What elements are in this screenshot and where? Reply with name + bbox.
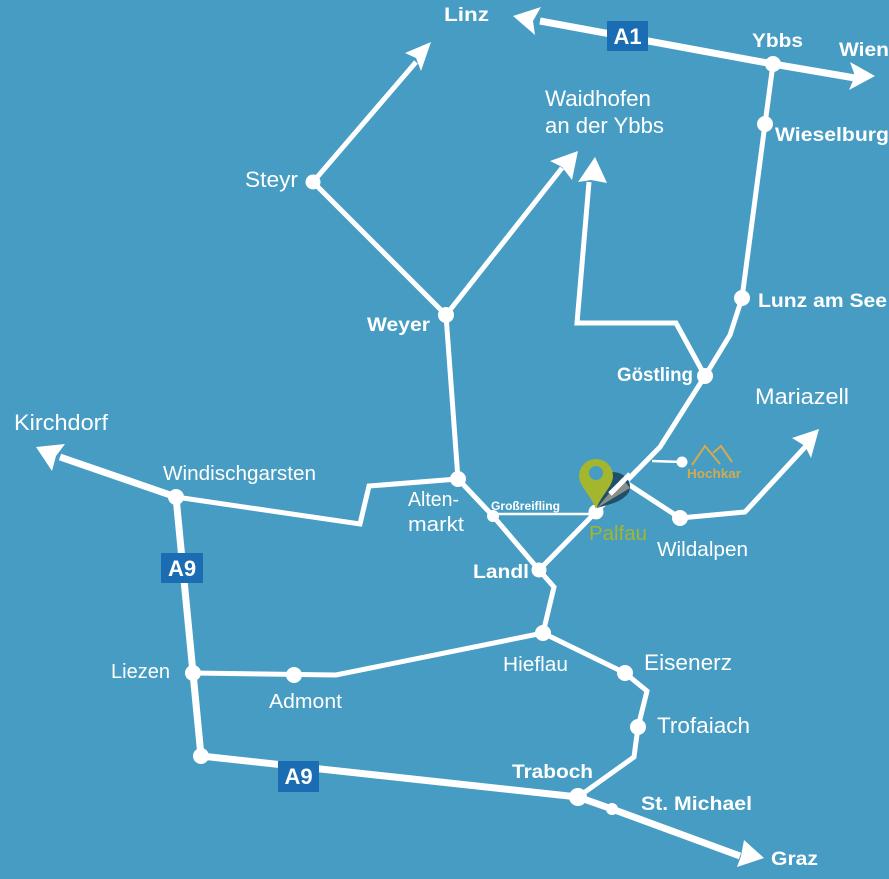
arrow: Wien <box>849 62 875 90</box>
place labels: Liezen <box>111 661 170 683</box>
arrow: Steyr north <box>405 42 431 71</box>
place labels: Alten- <box>408 489 459 511</box>
place labels: an der Ybbs <box>545 113 664 138</box>
Goestling to Landl road <box>539 376 705 570</box>
A9 motorway north <box>176 497 201 756</box>
place labels: Eisenerz <box>644 650 732 675</box>
place labels: Landl <box>473 561 529 583</box>
motorway badge: A9 north <box>161 553 203 583</box>
Liezen to Hieflau road <box>193 633 543 675</box>
place labels: Steyr <box>245 167 298 192</box>
place labels: Göstling <box>617 364 693 386</box>
Mariazell road <box>628 446 806 518</box>
place labels: Graz <box>771 848 818 870</box>
Ybbs to Goestling road <box>705 64 773 376</box>
junction dots <box>168 56 781 815</box>
Weyer to Waidhofen road <box>446 168 562 315</box>
arrow: Linz <box>513 7 541 35</box>
motorway badge: A1: A1 <box>613 24 642 49</box>
place labels: Mariazell <box>755 384 849 409</box>
place labels: Admont <box>269 691 342 713</box>
place labels: Waidhofen <box>545 86 651 111</box>
road to Graz <box>578 797 740 856</box>
arrow: Waidhofen from Goestling <box>578 157 607 183</box>
A9 motorway south <box>201 756 578 797</box>
place labels: Palfau <box>589 523 647 545</box>
place labels: Großreifling <box>491 501 560 513</box>
place labels: Windischgarsten <box>163 463 316 485</box>
Windischgarsten to Altenmarkt road <box>176 479 539 570</box>
Weyer to Altenmarkt road <box>446 315 458 479</box>
icon: Palfau location pin <box>579 459 630 509</box>
motorway badge: A1 <box>607 21 648 51</box>
Steyr road <box>313 62 446 315</box>
Goestling to Waidhofen road <box>577 182 705 376</box>
place labels: Ybbs <box>752 30 803 52</box>
motorway badge: A9 north: A9 <box>168 556 196 581</box>
place labels: Traboch <box>512 761 593 783</box>
place labels: Trofaiach <box>657 713 750 738</box>
arrow: Graz <box>737 840 764 867</box>
Hochkar link <box>652 461 682 462</box>
place labels: St. Michael <box>641 793 752 815</box>
place labels: Hieflau <box>503 654 568 676</box>
Grossreifling link <box>493 513 596 515</box>
motorway badge: A9 south: A9 <box>284 764 313 789</box>
place labels: Lunz am See <box>758 290 887 312</box>
place labels: Wieselburg <box>775 124 889 146</box>
arrow: Mariazell <box>792 429 819 458</box>
Hieflau to Traboch road <box>543 633 647 797</box>
A1 motorway <box>540 21 855 78</box>
arrow: Kirchdorf <box>36 444 65 471</box>
place labels: Wien <box>839 39 889 61</box>
Landl to Hieflau road <box>539 570 554 633</box>
place labels: Linz <box>444 4 489 26</box>
place labels: Kirchdorf <box>14 410 109 435</box>
Kirchdorf road <box>60 457 176 497</box>
arrow: Waidhofen from Weyer <box>550 151 578 180</box>
place labels: Wildalpen <box>657 539 748 561</box>
icon: Hochkar mountains <box>692 446 732 465</box>
place labels: markt <box>408 514 464 536</box>
place labels: Weyer <box>367 314 430 336</box>
place labels: Hochkar <box>687 467 741 481</box>
motorway badge: A9 south <box>278 761 319 792</box>
